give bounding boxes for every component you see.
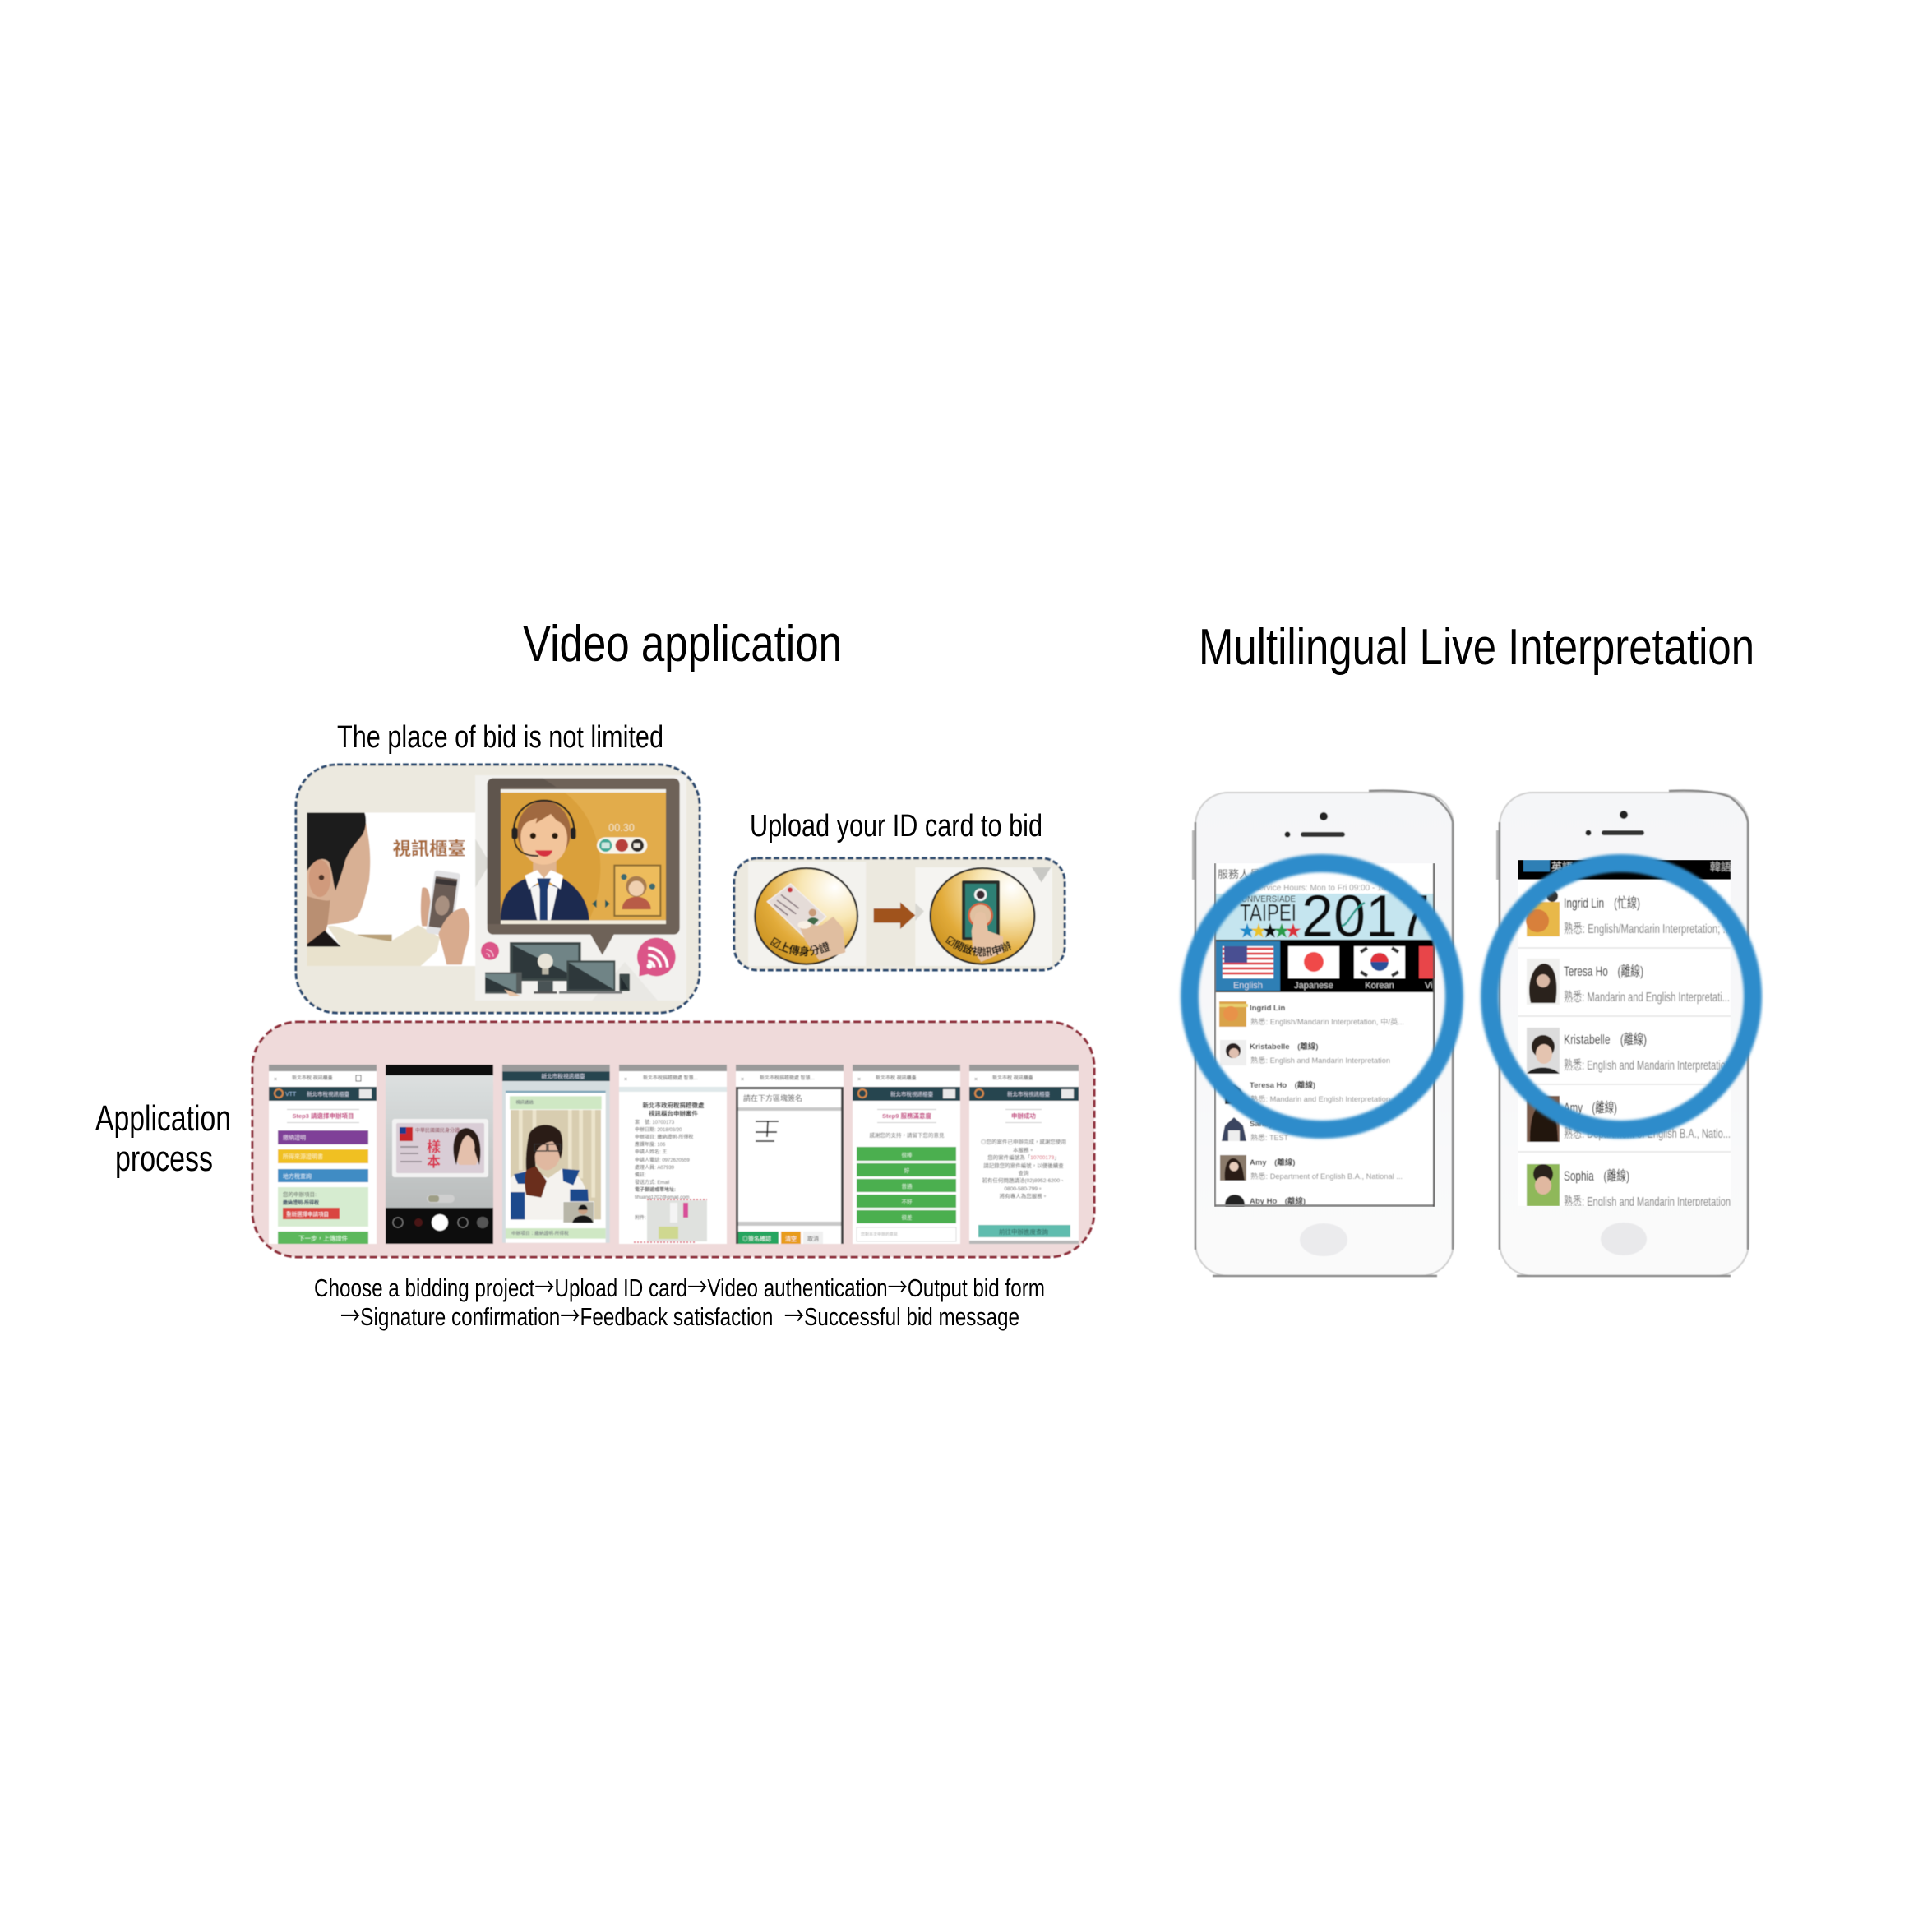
screen: successful bid message: 前往申辦進度查詢: [999, 1227, 1048, 1236]
phone screen: 韓語: [1710, 861, 1731, 873]
screen: choose a bidding project: 新北市稅視訊櫃臺: [307, 1090, 350, 1098]
heading: Upload your ID card to bid: Upload your ID card to bid: [750, 809, 1042, 844]
caption: application process steps: [314, 1267, 1045, 1333]
Japan flag: [1288, 946, 1339, 978]
screen: feedback satisfaction: 感謝您的支持，請留下您的意見: [870, 1131, 945, 1139]
title: Video application: Video application: [523, 616, 842, 673]
label: 視訊櫃臺: 視訊櫃臺: [393, 839, 466, 859]
screen: feedback satisfaction: 您對本次申辦的意見: [861, 1232, 898, 1237]
phone: interpreter list zoomed: [1490, 791, 1753, 1276]
screen: choose a bidding project: VTT: [285, 1092, 297, 1098]
phone screen: Japanese: [1294, 981, 1333, 991]
Korea flag: [1354, 946, 1405, 978]
phone screen: Korean: [1365, 981, 1394, 991]
screen: output bid form: 附件:: [635, 1214, 646, 1221]
screen: output bid form: 應課年度: 106: [635, 1141, 666, 1148]
screen: successful bid message: 將有專人為您服務。: [1000, 1192, 1047, 1199]
icon: upload ID card: ☑上傳身分證: [770, 937, 831, 957]
screen: upload ID card: 樣: [427, 1139, 441, 1155]
phone screen: [1214, 863, 1438, 1214]
interpreter rows: 熟悉: English/Mandarin Interpretation; ...: [1564, 922, 1731, 936]
screen: successful bid message: 若有任何問題請洽(02)8952-6200、: [982, 1176, 1065, 1184]
screen: output bid form: 新北市政府稅捐稽徵處: [643, 1101, 705, 1109]
five stars: ★: [1285, 922, 1301, 941]
screen: signature confirmation: 取消: [807, 1235, 819, 1242]
phone screen: 英語: [1551, 861, 1573, 873]
screen: feedback satisfaction: 新北市稅視訊櫃臺: [890, 1090, 934, 1098]
interpreter rows: 熟悉: English and Mandarin Interpretation: [1250, 1056, 1390, 1065]
screen: successful bid message: 申辦成功: [1011, 1112, 1036, 1120]
interpreter rows: 熟悉: Mandarin and English Interpretati...: [1564, 990, 1730, 1005]
icon: start video application: ☑開啟視訊申辦: [945, 936, 1011, 957]
panel: upload ID card: [732, 857, 1067, 972]
screen: choose a bidding project: 新北市稅 視訊櫃臺: [292, 1075, 333, 1081]
screen: output bid form: 新北市稅捐稽徵處 智慧...: [643, 1075, 698, 1081]
screen: successful bid message: [969, 1065, 1079, 1244]
five stars: [1240, 922, 1301, 938]
highlight ring: [1190, 863, 1454, 1130]
screen: output bid form: 申辦項目: 繳納證明-所得稅: [635, 1134, 693, 1140]
five stars: ★: [1250, 922, 1267, 941]
interpreter rows: Sophia (離線): [1564, 1168, 1629, 1184]
screen: choose a bidding project: 您的申辦項目:: [283, 1190, 317, 1198]
screen: successful bid message: 新北市稅 視訊櫃臺: [992, 1075, 1033, 1081]
screen: choose a bidding project: Step3 請選擇申辦項目: [292, 1112, 354, 1120]
illustration: call agent with headset: [501, 801, 589, 920]
phone screen: TAIPEI: [1240, 900, 1296, 927]
screen: successful bid message: ×: [974, 1077, 978, 1083]
screen: output bid form: 電子郵遞或單地址:: [635, 1186, 676, 1193]
screen: video authentication: 視訊通過:: [515, 1099, 534, 1106]
caption: application process steps: →Signature confirmation→Feedback satisfaction →Successful bid message: [340, 1296, 1019, 1333]
screen: choose a bidding project: [269, 1065, 377, 1244]
screen: output bid form: 處理人員: A07939: [635, 1164, 675, 1171]
screen: choose a bidding project: 繳納證明-所得稅: [283, 1199, 319, 1206]
interpreter rows: Ingrid Lin (忙線): [1564, 895, 1640, 911]
interpreter rows: Teresa Ho (離線): [1564, 964, 1643, 979]
interpreter rows: Ingrid Lin: [1250, 1004, 1285, 1013]
screen: signature confirmation: 新北市稅捐稽徵處 智慧...: [760, 1075, 815, 1081]
screen: output bid form: 案 號: 10700173: [635, 1119, 675, 1125]
phone body: [1496, 791, 1749, 1276]
screen: choose a bidding project: 地方稅查詢: [283, 1172, 312, 1180]
label: Application process: [95, 1098, 231, 1179]
inset caller: [614, 866, 660, 916]
interpreter rows: Teresa Ho (離線): [1250, 1080, 1315, 1090]
phone body: [1192, 791, 1454, 1276]
icon: connected devices: [485, 942, 630, 996]
screen: successful bid message: 您的案件編號為「10700173」: [987, 1153, 1060, 1161]
screen: choose a bidding project: 繳納證明: [283, 1134, 306, 1141]
interpreter rows: [1219, 1001, 1404, 1214]
interpreter rows: Aby Ho (離線): [1250, 1196, 1306, 1206]
screen: feedback satisfaction: 好: [904, 1167, 910, 1174]
phone screen: English: [1233, 981, 1263, 991]
interpreter rows: Amy (離線): [1250, 1158, 1295, 1167]
phone screen: UNIVERSIADE: [1241, 894, 1296, 904]
screen: signature confirmation: ×: [741, 1077, 744, 1083]
screen: output bid form: 申請人姓名: 王: [635, 1149, 667, 1155]
label: Application process: process: [115, 1139, 213, 1179]
US flag: [1223, 946, 1273, 978]
interpreter rows: 熟悉: Mandarin and English Interpretation: [1250, 1094, 1390, 1103]
screen: output bid form: tihuang1202@gmail.com: [635, 1195, 689, 1200]
icon: start video application: [929, 867, 1036, 965]
interpreter rows: Sandy (離線): [1250, 1119, 1301, 1129]
icon: pink wifi bubbles: [481, 938, 676, 976]
interpreter rows: 熟悉: TEST: [1250, 1133, 1289, 1142]
highlight ring: [1490, 863, 1753, 1130]
heading: The place of bid is not limited: The place of bid is not limited: [337, 720, 663, 755]
screen: feedback satisfaction: 很差: [901, 1213, 913, 1221]
interpreter rows: [1526, 890, 1731, 1209]
screen: choose a bidding project: 重新選擇申請項目: [286, 1210, 329, 1218]
screen: upload ID card: 本: [427, 1154, 441, 1170]
screen: video authentication: 申辦項目：繳納證明-所得稅: [511, 1230, 569, 1236]
caption: application process steps: Choose a bidding project→Upload ID card→Video authentication→Output bid form: [314, 1267, 1045, 1304]
screen: feedback satisfaction: Step9 服務滿意度: [882, 1112, 931, 1120]
screen: choose a bidding project: ×: [274, 1077, 277, 1083]
screen: output bid form: 申辦日期: 2018/03/20: [635, 1126, 682, 1133]
panel: application process screens: [252, 1022, 1094, 1257]
screen: video authentication: 新北市稅視訊櫃臺: [541, 1073, 585, 1080]
phone screen: 服務人員: [1218, 868, 1260, 880]
interpreter rows: 熟悉: Department of English B.A., National ...: [1250, 1172, 1403, 1181]
screen: feedback satisfaction: 普通: [901, 1182, 913, 1190]
screen: feedback satisfaction: 新北市稅 視訊櫃臺: [876, 1075, 917, 1081]
interpreter rows: Kristabelle (離線): [1250, 1042, 1318, 1052]
screen: output bid form: 發送方式: Email: [635, 1179, 669, 1186]
five stars: ★: [1262, 922, 1278, 941]
screen: feedback satisfaction: ×: [857, 1077, 861, 1083]
call timer: 00.30: [608, 822, 635, 834]
screen: output bid form: 備註:: [635, 1172, 646, 1178]
screen: output bid form: 視訊櫃台申辦案件: [649, 1109, 698, 1117]
screen: feedback satisfaction: [853, 1065, 960, 1244]
interpreter rows: Kristabelle (離線): [1564, 1032, 1647, 1047]
screen: signature confirmation: [736, 1065, 844, 1244]
interpreter rows: 熟悉: English/Mandarin Interpretation, 中/英...: [1250, 1017, 1404, 1026]
title: Multilingual Live Interpretation: Multilingual Live Interpretation: [1199, 619, 1754, 676]
screen: signature confirmation: 清空: [785, 1235, 797, 1242]
arrow: ID step to video step: [874, 902, 915, 929]
screen: successful bid message: 查詢: [1018, 1169, 1029, 1176]
screen: successful bid message: ◎您的案件已申辦完成，感謝您使用: [981, 1138, 1066, 1145]
icon: video call monitor: [481, 779, 680, 996]
interpreter rows: 熟悉: English and Mandarin Interpretation: [1564, 1058, 1731, 1073]
screen: successful bid message: 0800-580-799。: [1005, 1186, 1042, 1192]
screen: upload ID card: [386, 1065, 493, 1244]
interpreter rows: 熟悉: English and Mandarin Interpretation: [1564, 1195, 1731, 1209]
screen: feedback satisfaction: 不好: [901, 1198, 913, 1205]
panel: place of bid not limited: [296, 765, 700, 1013]
interpreter rows: Amy (離線): [1564, 1100, 1617, 1116]
label: Application process: Application: [95, 1098, 231, 1139]
screen: successful bid message: 新北市稅視訊櫃臺: [1007, 1090, 1051, 1098]
interpreter rows: 熟悉: Department of English B.A., Natio...: [1564, 1126, 1731, 1141]
screen: output bid form: 申請人電話: 0972620559: [635, 1157, 690, 1163]
phone screen: [1518, 860, 1731, 1209]
screen: choose a bidding project: 下一步，上傳證件: [298, 1234, 348, 1242]
five stars: ★: [1273, 922, 1290, 941]
five stars: ★: [1239, 922, 1255, 941]
call control buttons: [597, 837, 647, 853]
screen: output bid form: ×: [624, 1077, 627, 1083]
screen: feedback satisfaction: 很棒: [901, 1151, 913, 1158]
screen: video authentication: [502, 1065, 610, 1243]
screen: upload ID card: 中華民國國民身分證: [415, 1127, 460, 1134]
screen: successful bid message: 本服務。: [1013, 1146, 1034, 1153]
screen: choose a bidding project: 所得來源證明書: [283, 1153, 323, 1160]
phone: interpreter list with flags: [1190, 791, 1454, 1276]
phone screen: Service Hours: Mon to Fri 09:00 - 18:00: [1254, 884, 1398, 893]
photo: woman using a phone: [307, 812, 475, 966]
phone screen: 2017: [1301, 884, 1430, 950]
screen: successful bid message: 請記錄您的案件編號，以便後續查: [983, 1162, 1064, 1169]
icon: upload ID card: [753, 867, 859, 965]
screen: signature confirmation: ◎簽名確認: [742, 1235, 771, 1242]
screen: output bid form: [619, 1065, 727, 1244]
phone screen: Vie: [1425, 981, 1438, 991]
screen: signature confirmation: 請在下方區塊簽名: [743, 1093, 802, 1102]
